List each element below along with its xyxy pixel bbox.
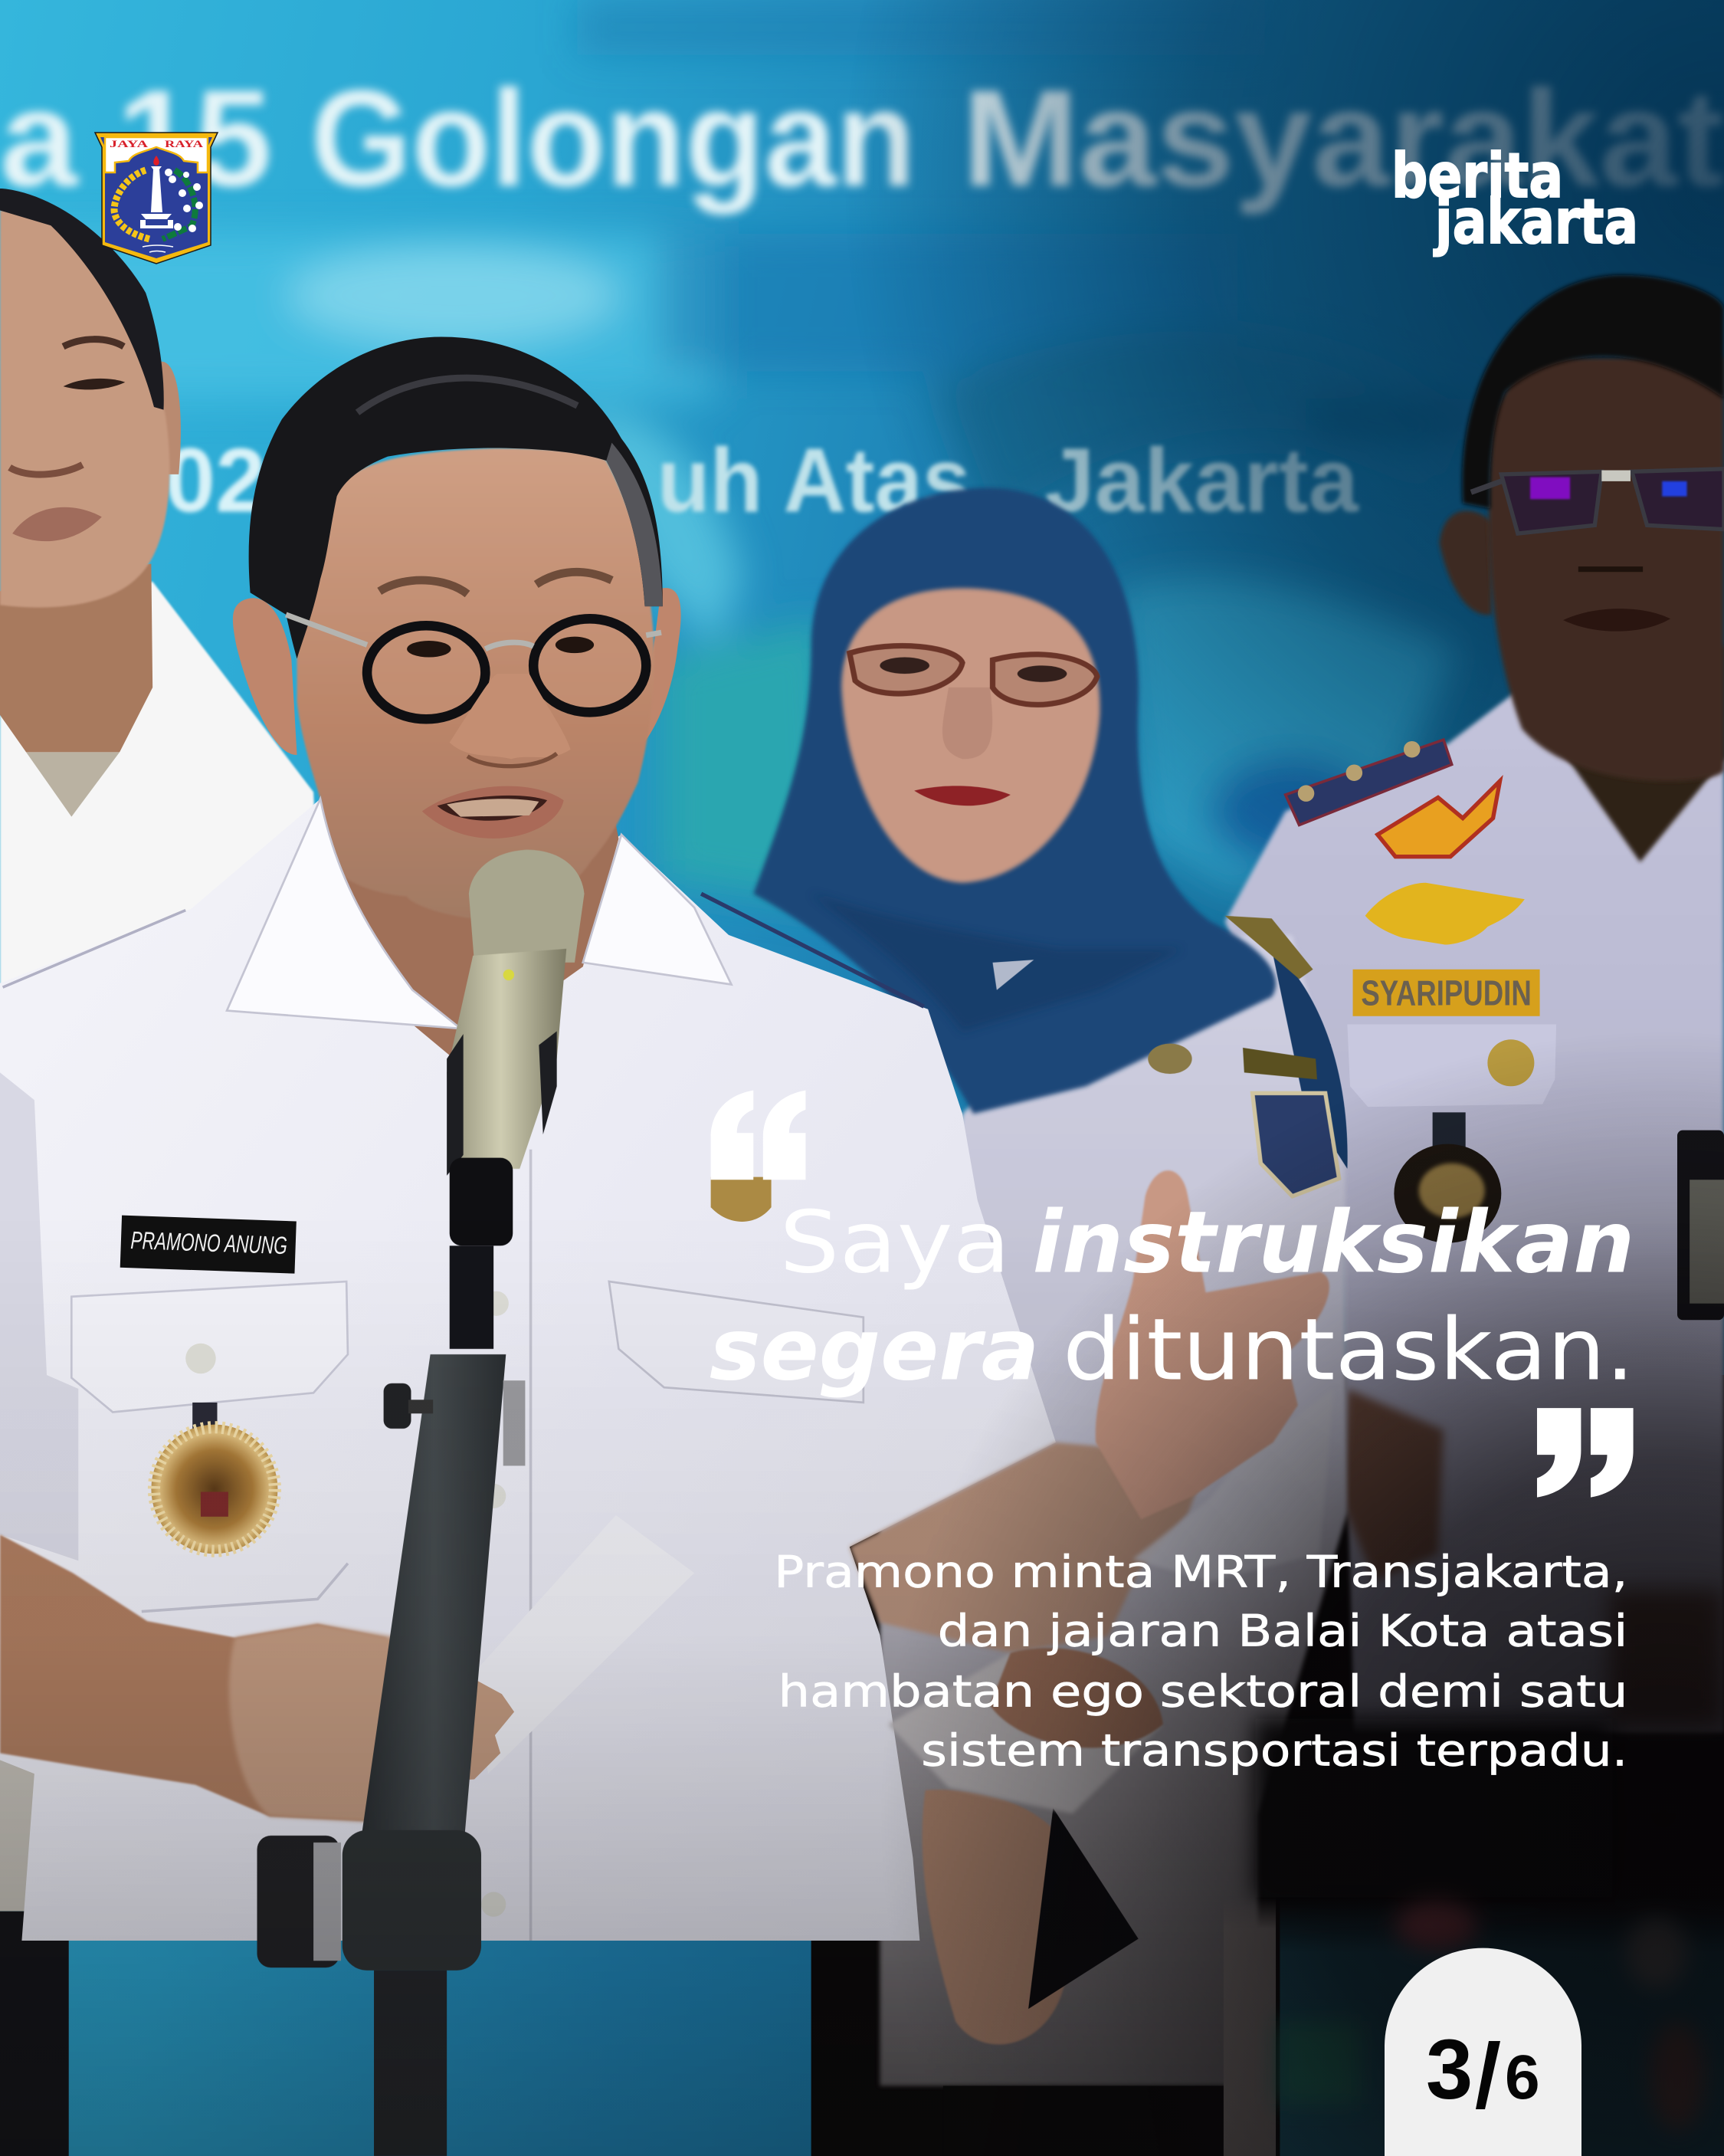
left pocket (71, 1281, 348, 1412)
blurred screen headline: a 15 (0, 62, 272, 215)
microphone on stand (257, 850, 585, 2156)
buttons (473, 1291, 509, 2119)
epaulette (1286, 740, 1452, 825)
tinted glasses (1471, 469, 1724, 533)
closing quotation mark (1537, 1408, 1634, 1498)
hand holding phone (923, 1790, 1066, 2044)
blurred screen location: uh Atas (657, 430, 971, 531)
clasped hand (990, 1648, 1163, 1747)
blurred screen location: Jakarta (1045, 430, 1359, 531)
subheading text: dan jajaran Balai Kota atasi (938, 1605, 1627, 1656)
shoulder seam (701, 894, 924, 1006)
forearm left (0, 1534, 412, 1823)
page number: 6 (1505, 2043, 1540, 2112)
blurred screen location (165, 430, 1359, 531)
placket (530, 1150, 532, 2156)
paper (477, 1515, 694, 1774)
sleeve tab (1243, 1048, 1317, 1079)
right official (1225, 275, 1724, 1732)
forearm right (850, 1442, 1210, 1652)
phone (1028, 1808, 1139, 2009)
blurred LED screen background (0, 0, 1724, 963)
neck (324, 770, 618, 1058)
motto: RAYA (165, 138, 204, 149)
dark stage backdrop behind lower bodies (0, 1375, 1724, 2156)
icon: Jakarta coat of arms (95, 133, 218, 264)
woman in navy hijab (753, 488, 1348, 2086)
quote headline (710, 1193, 1634, 1400)
collar emblem (1378, 781, 1500, 857)
blurred screen headline: Golongan (311, 62, 916, 215)
arm shadow (1340, 1389, 1444, 1581)
subheading text (774, 1546, 1627, 1777)
motto (110, 138, 204, 149)
page badge (1385, 1948, 1581, 2156)
fingers (454, 1676, 514, 1780)
blurred screen headline: Masyarakat (962, 62, 1724, 215)
subheading text: sistem transportasi terpadu. (921, 1725, 1627, 1777)
hair (249, 337, 663, 658)
subheading text: Pramono minta MRT, Transjakarta, (774, 1546, 1627, 1597)
name tag (120, 1216, 297, 1274)
page number: 3 (1426, 2023, 1473, 2117)
quote headline: Saya (779, 1193, 1011, 1292)
right pocket (609, 1281, 864, 1403)
logo: berita jakarta: jakarta (1434, 186, 1638, 258)
gold pin (1148, 1044, 1192, 1074)
name tag (1353, 970, 1540, 1016)
wings badge (1365, 883, 1525, 944)
name tag: SYARIPUDIN (1361, 973, 1532, 1012)
cuff (1132, 1389, 1333, 1581)
main speaker: Pramono Anung (0, 337, 1333, 2156)
mouth (422, 786, 564, 838)
subheading text: hambatan ego sektoral demi satu (778, 1665, 1627, 1717)
hanging medal (1394, 1112, 1501, 1243)
rice wreath (114, 170, 149, 239)
blurred screen location: 02 (165, 430, 266, 531)
foreground screen (943, 1590, 1724, 2156)
blurred screen headline (0, 62, 1724, 215)
sleeve patch (1253, 1093, 1339, 1196)
glasses (286, 615, 661, 719)
star medal (1487, 1039, 1534, 1086)
opening quotation mark (711, 1091, 805, 1180)
jasmine branch (162, 169, 203, 239)
name tag: PRAMONO ANUNG (130, 1226, 288, 1259)
id card (1677, 1131, 1724, 1320)
logo: berita jakarta (1391, 140, 1638, 258)
quote headline: instruksikan (1032, 1193, 1634, 1292)
quote headline: dituntaskan. (1063, 1301, 1634, 1400)
left hand (229, 1624, 398, 1823)
motto: JAYA (110, 138, 149, 149)
left background official (0, 189, 319, 1100)
ears (233, 588, 681, 755)
collars (227, 799, 460, 1029)
sleeve left (0, 1072, 78, 1560)
shoulder tab (1225, 916, 1313, 979)
eyebrows (379, 572, 611, 594)
lower sleeve (888, 1652, 1163, 1813)
collar pin (711, 1177, 772, 1222)
nose (450, 674, 571, 759)
page number (1426, 2023, 1540, 2117)
monument (140, 156, 173, 228)
logo: berita jakarta: berita (1391, 140, 1563, 212)
gesturing hand (1096, 1170, 1329, 1519)
medal (151, 1403, 277, 1554)
quote headline: segera (710, 1301, 1039, 1400)
face (297, 448, 654, 918)
